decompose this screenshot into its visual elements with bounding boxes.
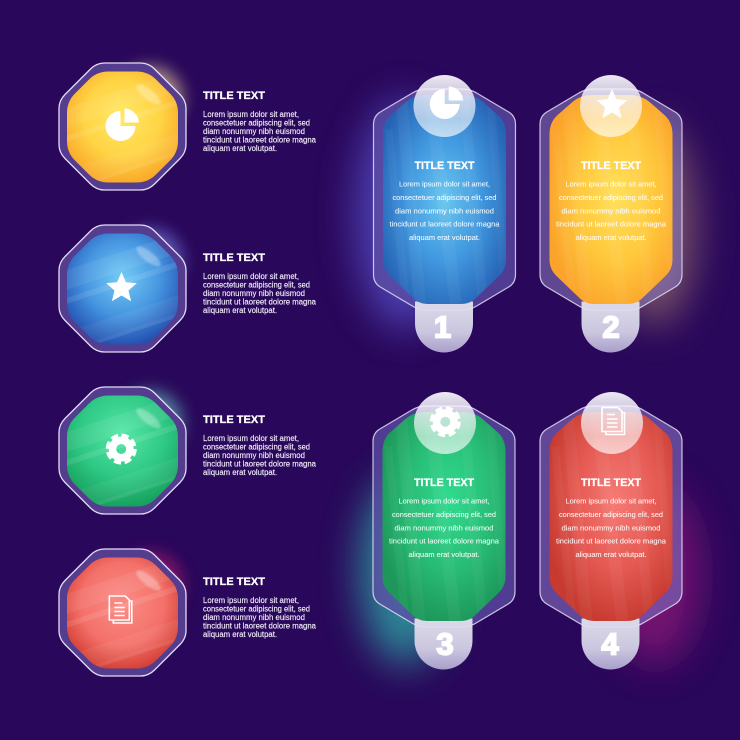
title 1: TITLE TEXT xyxy=(203,90,265,102)
description 4: diam nonummy nibh euismod xyxy=(203,613,305,622)
panel 4: red xyxy=(540,392,682,670)
description: diam nonummy nibh euismod xyxy=(562,524,660,532)
description: Lorem ipsum dolor sit amet, xyxy=(566,496,656,506)
description: diam nonummy nibh euismod xyxy=(562,206,660,216)
description: aliquam erat volutpat. xyxy=(576,550,646,559)
description xyxy=(556,180,667,242)
glow: panel 3 green xyxy=(360,475,450,665)
icon: document xyxy=(602,408,624,434)
item 4: red badge row xyxy=(52,549,317,682)
number 2: 2 xyxy=(602,310,620,344)
description 2: tincidunt ut laoreet dolore magna xyxy=(203,298,317,306)
icon: gear xyxy=(432,409,458,435)
red badge xyxy=(52,549,192,682)
description 4: aliquam erat volutpat. xyxy=(203,630,277,639)
title: TITLE TEXT xyxy=(414,160,475,172)
icon circle 3 xyxy=(414,392,476,454)
number 4: 4 xyxy=(601,626,619,662)
title: TITLE TEXT xyxy=(581,477,641,489)
title: TITLE TEXT xyxy=(581,160,641,172)
description: aliquam erat volutpat. xyxy=(408,550,480,559)
description 3: aliquam erat volutpat. xyxy=(203,468,277,477)
icon: gear xyxy=(108,436,134,462)
description: Lorem ipsum dolor sit amet, xyxy=(399,180,490,188)
description: consectetuer adipiscing elit, sed xyxy=(559,510,663,519)
panel 2: yellow xyxy=(540,75,682,352)
description: tincidunt ut laoreet dolore magna xyxy=(556,220,667,228)
description: aliquam erat volutpat. xyxy=(576,233,646,242)
description 2: diam nonummy nibh euismod xyxy=(203,289,305,298)
description: diam nonummy nibh euismod xyxy=(395,206,494,216)
description 1: diam nonummy nibh euismod xyxy=(203,127,305,136)
description xyxy=(556,496,667,559)
description 2: consectetuer adipiscing elit, sed xyxy=(203,280,310,290)
description 4: Lorem ipsum dolor sit amet, xyxy=(203,596,299,605)
panel 1: blue xyxy=(374,75,516,352)
title 3: TITLE TEXT xyxy=(203,414,265,426)
number tab 2 xyxy=(582,302,640,352)
description: Lorem ipsum dolor sit amet, xyxy=(398,496,490,506)
glow: panel 2 yellow xyxy=(615,125,695,325)
icon: document xyxy=(109,596,132,623)
blue badge xyxy=(52,225,192,358)
description: tincidunt ut laoreet dolore magna xyxy=(556,536,667,546)
yellow badge xyxy=(52,63,192,196)
icon: star xyxy=(597,89,627,118)
number tab 1 xyxy=(415,302,473,352)
number 1: 1 xyxy=(434,310,451,344)
description 1: Lorem ipsum dolor sit amet, xyxy=(203,110,299,119)
description 3: consectetuer adipiscing elit, sed xyxy=(203,442,310,452)
title 2: TITLE TEXT xyxy=(203,252,265,264)
description xyxy=(390,180,500,242)
description 2: aliquam erat volutpat. xyxy=(203,306,277,315)
icon: star xyxy=(106,272,137,301)
number tab 4 xyxy=(582,618,640,670)
description 1: consectetuer adipiscing elit, sed xyxy=(203,118,310,128)
icon: pie chart xyxy=(430,86,463,119)
description xyxy=(389,496,500,559)
green badge xyxy=(52,387,192,520)
description 2: Lorem ipsum dolor sit amet, xyxy=(203,272,299,281)
description: tincidunt ut laoreet dolore magna xyxy=(390,220,500,228)
icon circle 2 xyxy=(580,75,642,137)
description: consectetuer adipiscing elit, sed xyxy=(392,193,496,202)
icon: pie chart xyxy=(106,108,139,141)
icon circle 4 xyxy=(581,392,643,454)
glow: panel 1 blue xyxy=(355,100,455,330)
panel 3: green xyxy=(373,392,515,670)
description 4: consectetuer adipiscing elit, sed xyxy=(203,604,310,614)
description 4: tincidunt ut laoreet dolore magna xyxy=(203,622,317,630)
description: consectetuer adipiscing elit, sed xyxy=(559,193,663,202)
description: consectetuer adipiscing elit, sed xyxy=(392,510,496,519)
description 1: tincidunt ut laoreet dolore magna xyxy=(203,136,317,144)
description: diam nonummy nibh euismod xyxy=(394,524,494,532)
number 3: 3 xyxy=(436,626,454,662)
item 1: yellow badge row xyxy=(52,63,317,196)
description 2 xyxy=(203,272,317,315)
description 3: tincidunt ut laoreet dolore magna xyxy=(203,460,317,468)
description 4 xyxy=(203,596,317,639)
description: Lorem ipsum dolor sit amet, xyxy=(566,180,656,188)
title: TITLE TEXT xyxy=(414,477,474,489)
title 4: TITLE TEXT xyxy=(203,576,265,588)
description 3: Lorem ipsum dolor sit amet, xyxy=(203,434,299,443)
item 2: blue badge row xyxy=(52,225,317,358)
description 1: aliquam erat volutpat. xyxy=(203,144,277,153)
description 3 xyxy=(203,434,317,477)
glow: panel 4 red xyxy=(610,485,700,665)
description 3: diam nonummy nibh euismod xyxy=(203,451,305,460)
number tab 3 xyxy=(414,618,472,670)
item 3: green badge row xyxy=(52,387,317,520)
description 1 xyxy=(203,110,317,153)
description: aliquam erat volutpat. xyxy=(409,233,480,242)
description: tincidunt ut laoreet dolore magna xyxy=(389,536,500,546)
icon circle 1 xyxy=(414,75,476,137)
